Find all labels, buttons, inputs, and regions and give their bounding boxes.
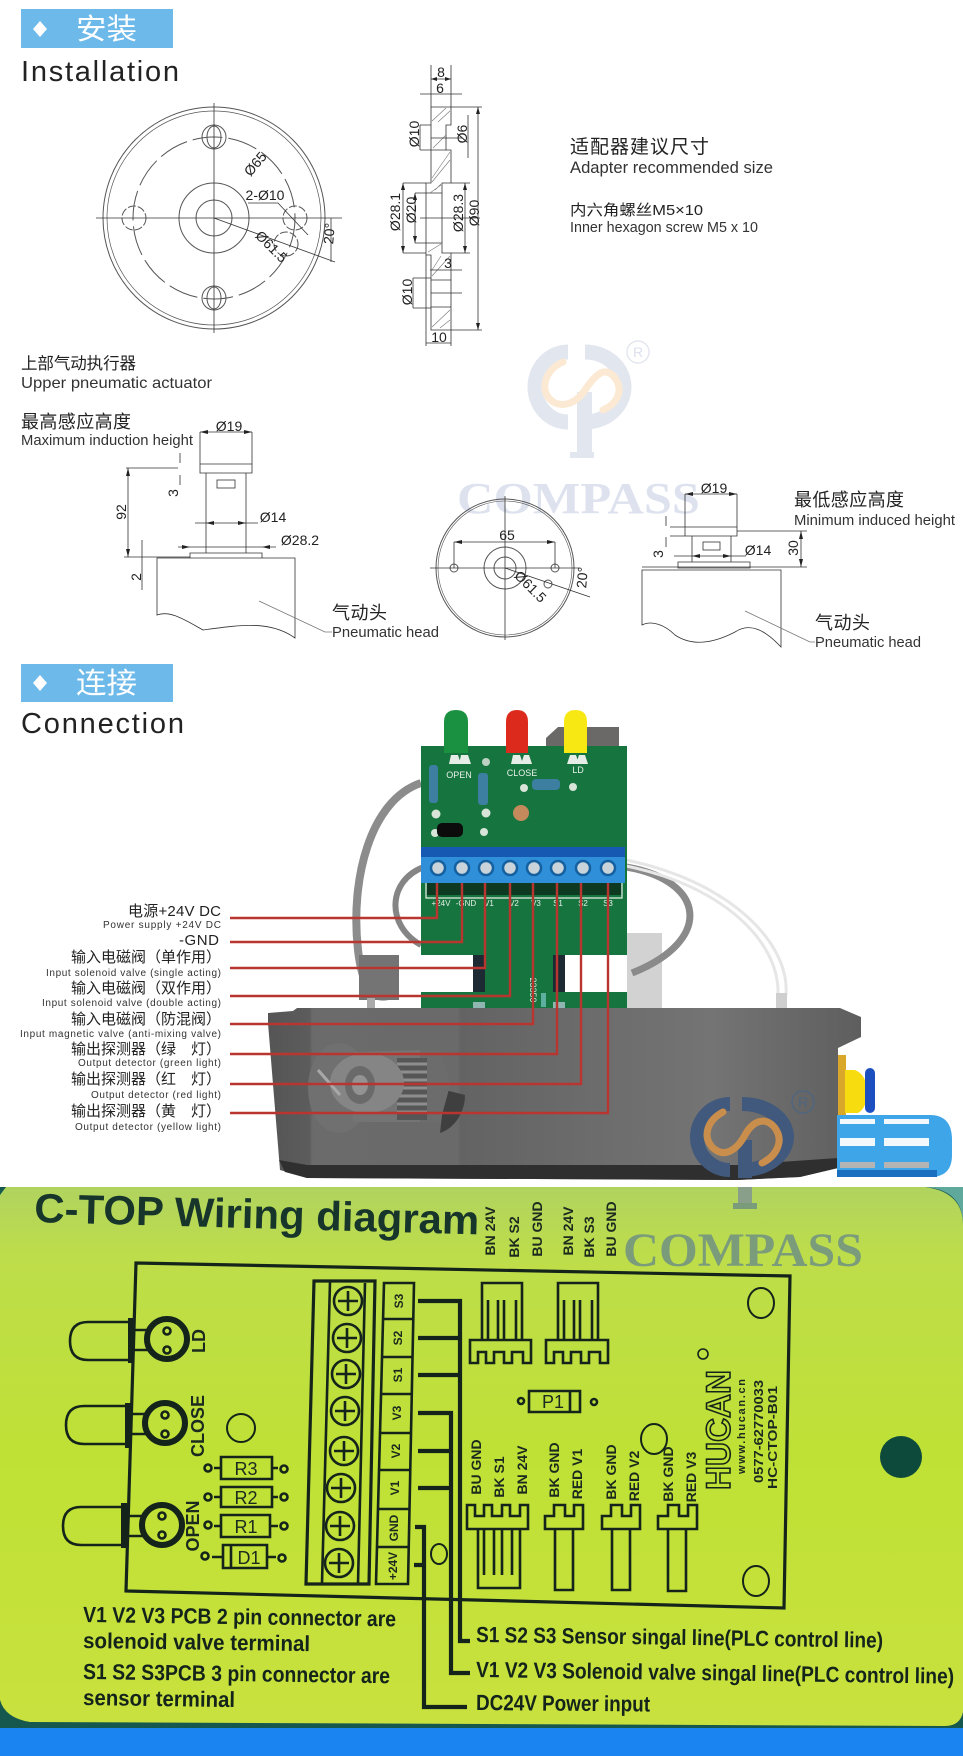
- HUCAN branding: 0577-62770033: [751, 1380, 766, 1483]
- terminal block: [306, 1281, 375, 1584]
- HUCAN branding: HUCAN: [700, 1370, 738, 1490]
- plate notes left: [83, 1602, 396, 1712]
- terminal labels: GND: [387, 1514, 401, 1541]
- note: adapter recommended size: Adapter recommended size: [570, 159, 773, 177]
- drawing: maximum height sensor side view: Ø19: [216, 418, 242, 434]
- top 3-pin connectors: [470, 1283, 608, 1363]
- board components: 23350: [528, 977, 538, 1003]
- HUCAN branding: www.hucan.cn: [736, 1379, 748, 1475]
- wire colour labels: BU GND: [603, 1201, 619, 1257]
- drawing: maximum height sensor side view: 3: [165, 489, 181, 497]
- diode P1: P1: [542, 1392, 564, 1412]
- cables: [356, 783, 786, 997]
- terminal legend labels: 输出探测器（绿 灯）: [71, 1041, 221, 1058]
- note: adapter recommended size: 适配器建议尺寸: [570, 136, 709, 158]
- terminal legend labels: 输出探测器（红 灯）: [71, 1071, 221, 1088]
- note: adapter recommended size: Inner hexagon screw M5 x 10: [570, 220, 758, 236]
- LEDs: [444, 710, 468, 753]
- signal wires: [414, 1301, 470, 1707]
- terminal labels: [376, 1283, 414, 1584]
- wire colour labels: BK S2: [506, 1216, 522, 1258]
- diode P1: [518, 1391, 597, 1412]
- drawing: adapter plate section view: Ø10: [399, 279, 415, 305]
- terminal legend labels: Input magnetic valve (anti-mixing valve): [20, 1029, 221, 1040]
- watermark: compass text on plate: COMPASS: [623, 1224, 863, 1277]
- terminal block: V3: [531, 899, 541, 908]
- drawing: adapter plate small view: Ø61.5: [511, 567, 550, 606]
- plate notes right: DC24V Power input: [476, 1690, 651, 1717]
- plate notes left: S1 S2 S3PCB 3 pin connector are: [83, 1659, 390, 1688]
- drawing: adapter plate section view: 3: [444, 255, 452, 271]
- wire colour labels: BN 24V: [560, 1206, 576, 1256]
- label: minimum induced height: 最低感应高度: [794, 490, 904, 510]
- label: minimum induced height: [794, 490, 955, 529]
- plate notes left: sensor terminal: [83, 1685, 235, 1712]
- plate notes left: V1 V2 V3 PCB 2 pin connector are: [83, 1602, 396, 1631]
- drawing: minimum height sensor side view: Ø19: [701, 480, 727, 496]
- label: pneumatic head left: Pneumatic head: [332, 625, 439, 641]
- drawing: adapter plate section view: 8: [437, 64, 445, 80]
- housing: [268, 1008, 861, 1180]
- drawing: adapter plate small view: 65: [499, 527, 515, 543]
- drawing: maximum height sensor side view: 2: [128, 573, 144, 581]
- wire colour labels: BK GND: [660, 1446, 676, 1502]
- plate hole: [880, 1436, 922, 1478]
- red leader lines: [230, 883, 608, 1113]
- terminal labels: V2: [389, 1443, 403, 1458]
- watermark: compass logo on photo: [697, 1091, 814, 1178]
- drawing: minimum height sensor side view: [642, 480, 815, 647]
- resistors and diode: [202, 1457, 288, 1568]
- terminal legend labels: 输入电磁阀（双作用）: [71, 980, 221, 997]
- lower connectors: [467, 1505, 697, 1591]
- label: upper pneumatic actuator: [21, 354, 213, 392]
- grey box behind board: [546, 727, 619, 746]
- drawing: adapter plate front view: [96, 103, 342, 333]
- LEDs on plate: OPEN: [183, 1500, 203, 1552]
- terminal labels: S1: [391, 1367, 405, 1382]
- resistors and diode: R2: [234, 1488, 258, 1508]
- drawing: adapter plate section view: 6: [436, 80, 444, 96]
- section header: connection: 连接: [76, 667, 137, 700]
- drawing: minimum height sensor side view: 30: [785, 540, 801, 556]
- terminal block: S2: [578, 899, 588, 908]
- watermark: compass logo on photo: R: [798, 1094, 808, 1110]
- label: pneumatic head right: [815, 613, 921, 651]
- drawing: minimum height sensor side view: 3: [650, 550, 666, 558]
- wire colour labels: RED V2: [626, 1451, 642, 1501]
- label: pneumatic head right: Pneumatic head: [815, 635, 921, 651]
- heading: Installation: Installation: [21, 56, 179, 88]
- drawing: adapter plate section view: Ø20: [403, 197, 419, 223]
- LEDs on plate: CLOSE: [188, 1395, 208, 1457]
- LEDs on plate: LD: [189, 1329, 209, 1353]
- drawing: adapter plate front view: Ø65: [241, 148, 270, 179]
- section header: connection: [21, 664, 173, 702]
- drawing: minimum height sensor side view: Ø14: [745, 542, 771, 558]
- wire colour labels: BK S1: [491, 1456, 507, 1498]
- pneumatic fittings: [776, 993, 952, 1177]
- drawing: adapter plate section view: [387, 64, 482, 346]
- watermark: compass text on plate: [623, 1187, 863, 1277]
- terminal legend labels: Output detector (yellow light): [75, 1122, 221, 1133]
- photo: wiring diagram plate: [0, 1185, 963, 1728]
- drawing: adapter plate section view: Ø10: [406, 121, 422, 147]
- wire colour labels: BK GND: [546, 1442, 562, 1498]
- drawing: adapter plate section view: Ø90: [466, 200, 482, 226]
- wire colour labels: RED V1: [569, 1449, 585, 1499]
- terminal labels: S2: [391, 1330, 405, 1345]
- terminal legend labels: 电源+24V DC: [128, 903, 221, 920]
- terminal labels: S3: [392, 1293, 406, 1308]
- label: pneumatic head left: [332, 603, 439, 641]
- wire colour labels: BN 24V: [482, 1206, 498, 1256]
- drawing: adapter plate small view: [430, 496, 591, 640]
- drawing: adapter plate section view: Ø28.3: [450, 194, 466, 232]
- terminal block: S3: [603, 899, 613, 908]
- label: pneumatic head left: 气动头: [332, 603, 387, 623]
- plate title: C-TOP Wiring diagram: [34, 1185, 480, 1243]
- plate notes right: S1 S2 S3 Sensor singal line(PLC control line): [476, 1622, 883, 1653]
- watermark: compass logo centre: [457, 341, 700, 523]
- terminal labels: +24V: [386, 1552, 400, 1580]
- drawing: adapter plate section view: Ø28.1: [387, 193, 403, 231]
- watermark: compass logo centre: R: [633, 344, 643, 360]
- note: adapter recommended size: 内六角螺丝M5×10: [570, 202, 703, 219]
- terminal legend labels: 输入电磁阀（单作用）: [71, 949, 221, 966]
- terminal legend labels: Power supply +24V DC: [103, 920, 221, 931]
- board components: CLOSE: [507, 768, 537, 778]
- label: maximum induction height: 最高感应高度: [21, 412, 131, 432]
- drawing: adapter plate small view: 20°: [573, 566, 591, 589]
- resistors and diode: R1: [234, 1517, 258, 1537]
- wire colour labels: BK GND: [603, 1444, 619, 1500]
- wire colour labels: [468, 1201, 699, 1502]
- wire colour labels: BU GND: [468, 1439, 484, 1495]
- label: maximum induction height: Maximum induction height: [21, 433, 193, 449]
- section header: installation: 安装: [76, 13, 137, 46]
- plate notes right: [476, 1622, 954, 1717]
- terminal block: V1: [484, 899, 494, 908]
- resistors and diode: R3: [234, 1459, 258, 1479]
- HUCAN branding: [698, 1349, 780, 1490]
- drawing: maximum height sensor side view: [113, 418, 332, 638]
- wire colour labels: BK S3: [581, 1216, 597, 1258]
- drawing: adapter plate front view: 20°: [320, 222, 338, 245]
- drawing: adapter plate front view: 2-Ø10: [246, 187, 285, 203]
- label: pneumatic head right: 气动头: [815, 613, 870, 633]
- connectors: [359, 955, 399, 1000]
- note: adapter recommended size: [570, 136, 773, 236]
- terminal labels: V1: [388, 1480, 402, 1495]
- section header: installation: [21, 9, 173, 48]
- wire colour labels: BU GND: [529, 1201, 545, 1257]
- LEDs on plate: [63, 1318, 209, 1552]
- watermark: compass logo centre: COMPASS: [457, 474, 700, 523]
- terminal block: +24V: [432, 899, 451, 908]
- board components: [429, 755, 588, 1008]
- footer blue band: [0, 1728, 963, 1756]
- terminal legend labels: Output detector (green light): [78, 1058, 221, 1069]
- HUCAN branding: HC-CTOP-B01: [765, 1386, 780, 1489]
- terminal legend labels: Output detector (red light): [91, 1090, 221, 1101]
- label: maximum induction height: [21, 412, 193, 449]
- label: upper pneumatic actuator: 上部气动执行器: [21, 354, 136, 373]
- terminal block: [421, 847, 625, 908]
- terminal legend labels: 输入电磁阀（防混阀）: [71, 1011, 221, 1028]
- mounting holes: [227, 1288, 774, 1596]
- label: upper pneumatic actuator: Upper pneumatic actuator: [21, 375, 213, 392]
- drawing: maximum height sensor side view: 92: [113, 504, 129, 520]
- terminal legend labels: [20, 903, 221, 1133]
- wire colour labels: BN 24V: [514, 1445, 530, 1495]
- resistors and diode: D1: [237, 1548, 261, 1568]
- photo: actuator with circuit board: [230, 710, 952, 1180]
- wire colour labels: RED V3: [683, 1452, 699, 1502]
- label: minimum induced height: Minimum induced height: [794, 513, 955, 529]
- terminal block: -GND: [456, 899, 476, 908]
- drawing: maximum height sensor side view: Ø28.2: [281, 532, 319, 548]
- plate notes left: solenoid valve terminal: [83, 1628, 310, 1656]
- drawing: adapter plate front view: Ø61.5: [252, 227, 291, 266]
- drawing: maximum height sensor side view: Ø14: [260, 509, 286, 525]
- terminal block: S1: [553, 899, 563, 908]
- circuit board: [421, 746, 627, 1008]
- board outline: [126, 1263, 790, 1608]
- terminal legend labels: Input solenoid valve (single acting): [46, 968, 221, 979]
- terminal block: V2: [509, 899, 519, 908]
- cable gland: [308, 1043, 465, 1133]
- board components: LD: [572, 765, 584, 775]
- drawing: adapter plate section view: 10: [431, 329, 447, 345]
- terminal labels: V3: [390, 1405, 404, 1420]
- drawing: adapter plate section view: Ø6: [454, 124, 470, 143]
- heading: Connection: Connection: [21, 708, 184, 740]
- terminal legend labels: Input solenoid valve (double acting): [42, 998, 221, 1009]
- board components: OPEN: [446, 770, 472, 780]
- terminal legend labels: -GND: [179, 932, 219, 949]
- terminal legend labels: 输出探测器（黄 灯）: [71, 1103, 221, 1120]
